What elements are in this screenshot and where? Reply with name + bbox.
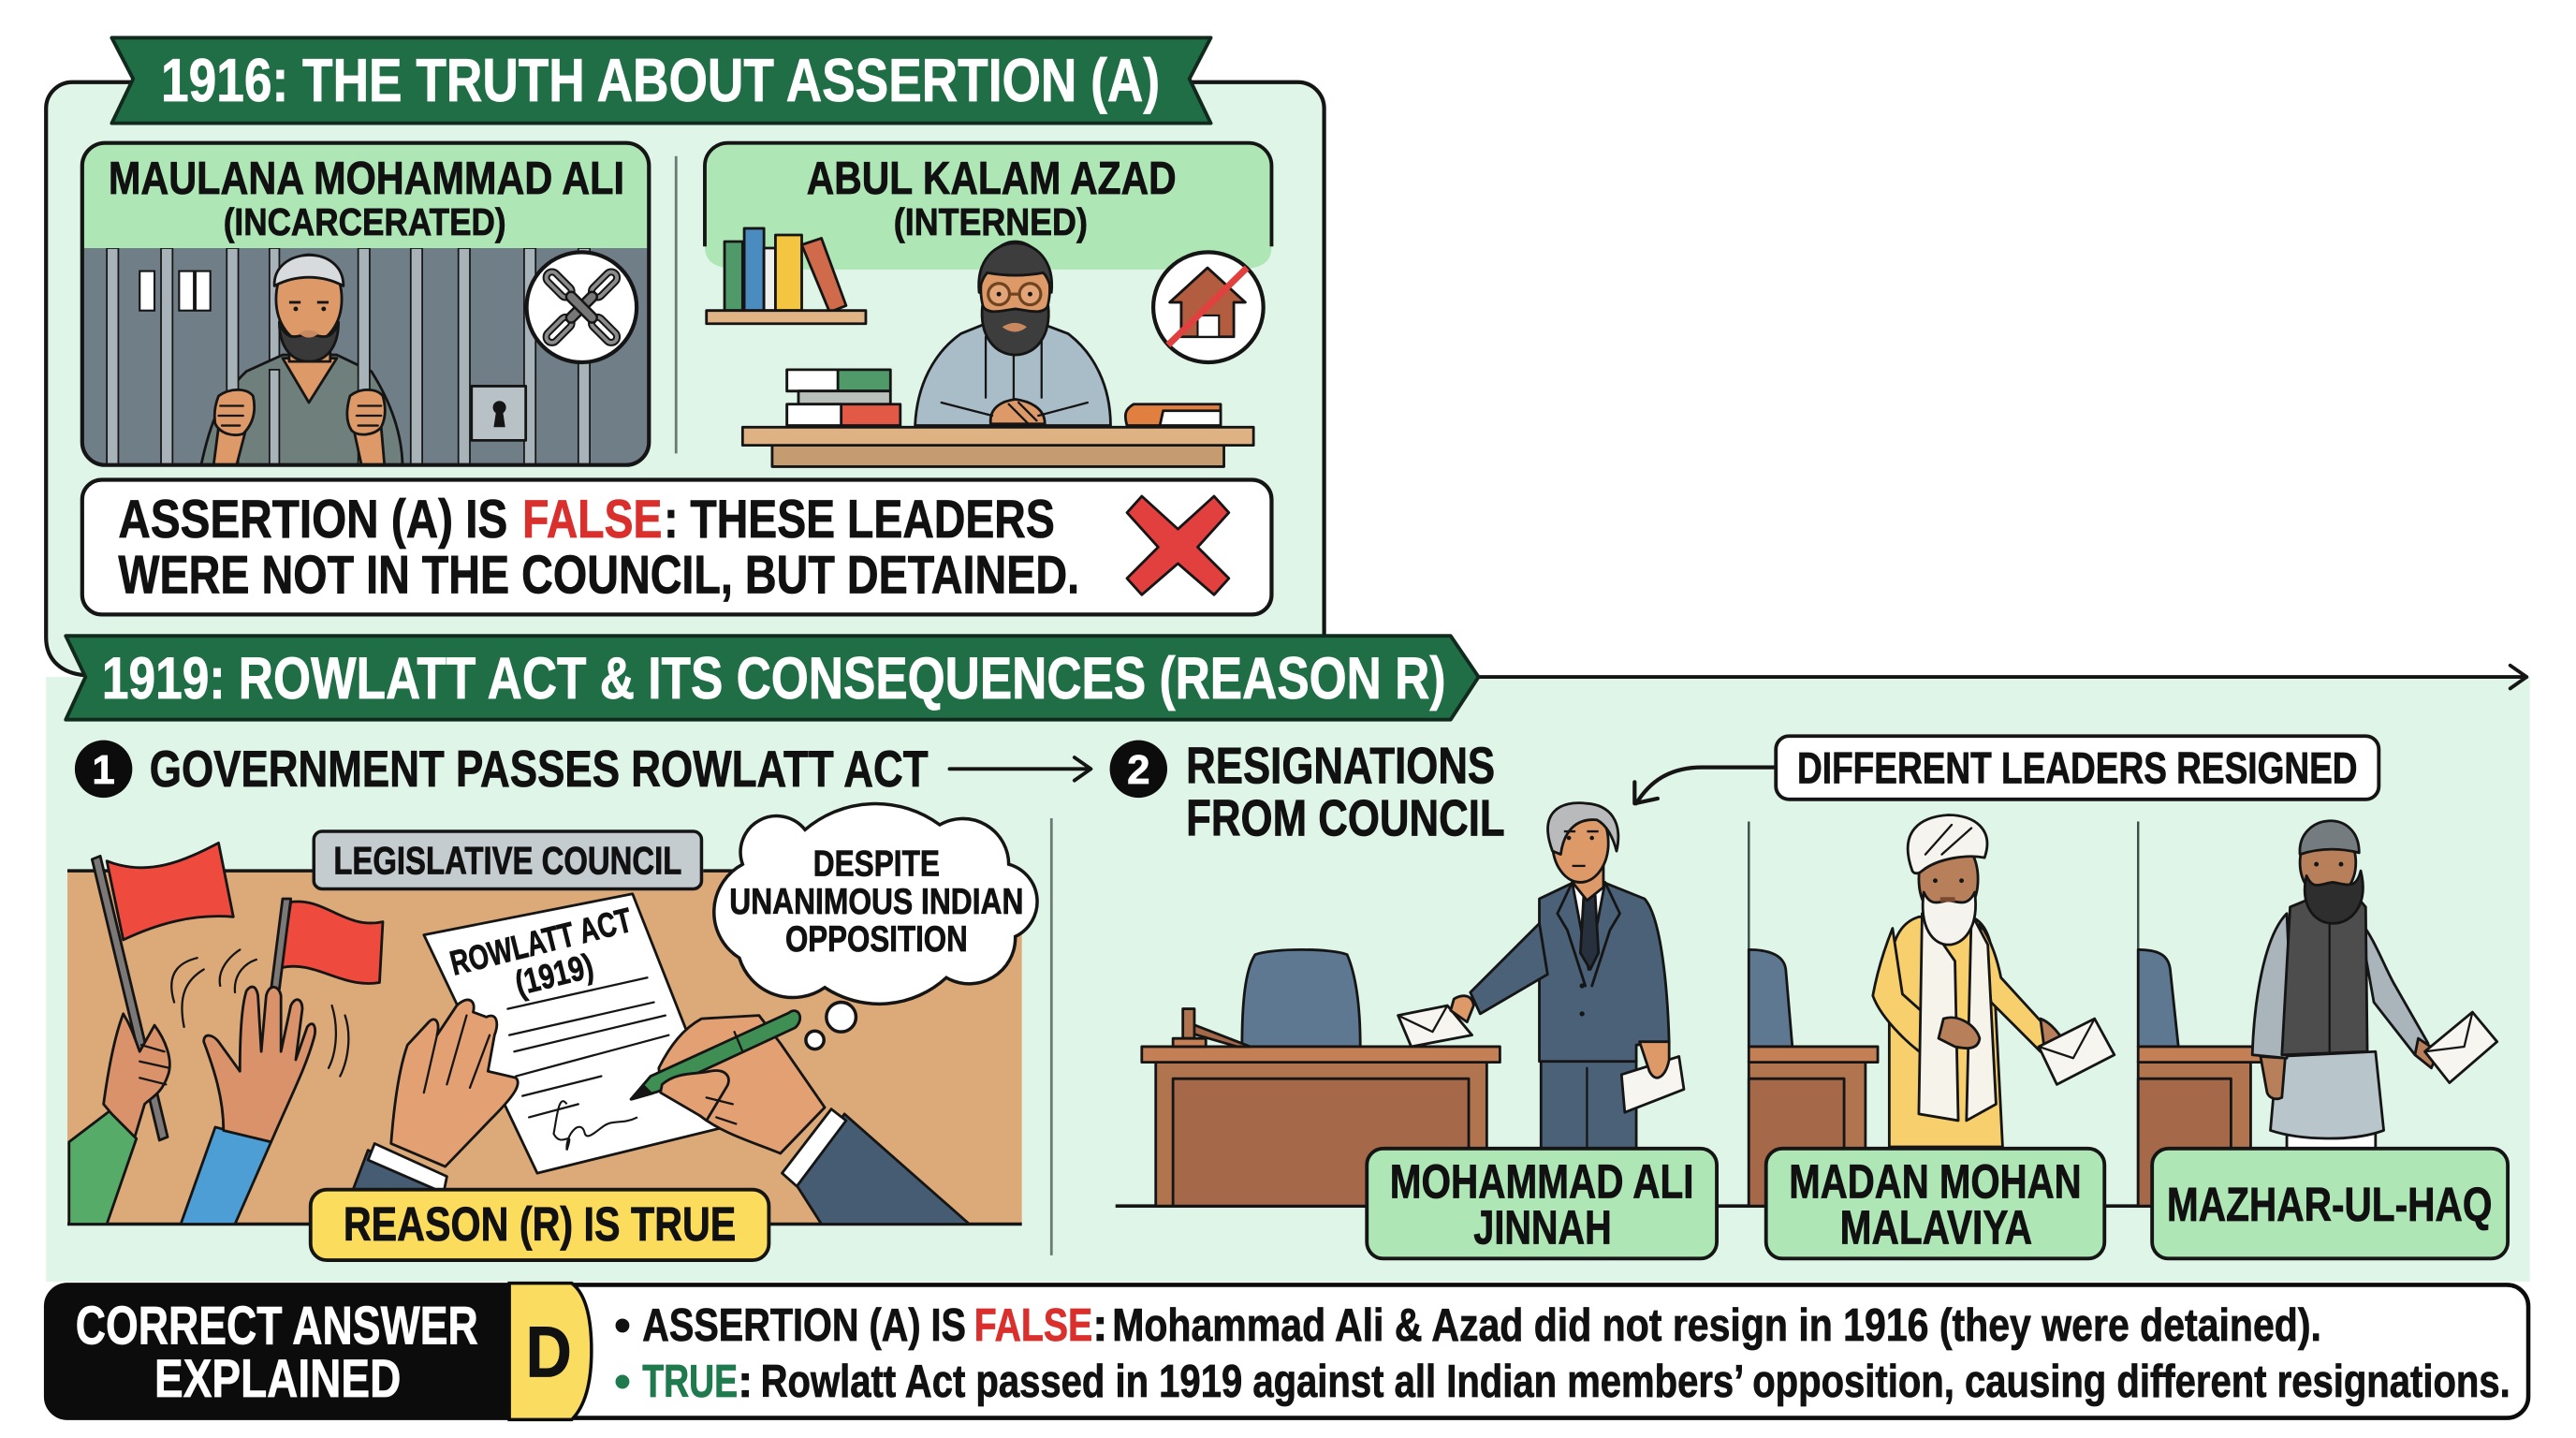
scene: signing the Rowlatt Act bbox=[67, 843, 1022, 1232]
council desk with chair and gavel bbox=[1142, 949, 1500, 1206]
answer title: EXPLAINED bbox=[154, 1349, 401, 1409]
desk with books bbox=[742, 370, 1253, 466]
verdict text: FALSE bbox=[522, 490, 662, 550]
label: Mohammad Ali Jinnah: JINNAH bbox=[1473, 1201, 1612, 1255]
step 2 heading: RESIGNATIONS bbox=[1186, 737, 1495, 794]
banner: 1919 heading bbox=[66, 636, 1479, 720]
answer letter bbox=[509, 1284, 592, 1419]
person: Mazhar-ul-Haq bbox=[2252, 821, 2497, 1151]
panel: 1919 reason bbox=[46, 636, 2530, 1282]
envelope in left hand bbox=[1398, 1005, 1472, 1047]
verdict text: WERE NOT IN THE COUNCIL, BUT DETAINED. bbox=[118, 546, 1079, 606]
name: Abul Kalam Azad: ABUL KALAM AZAD bbox=[807, 154, 1177, 204]
answer letter: D bbox=[526, 1313, 572, 1393]
explanation text: : bbox=[738, 1357, 753, 1407]
waving motion marks bbox=[171, 949, 348, 1077]
label: Mohammad Ali Jinnah: MOHAMMAD ALI bbox=[1390, 1154, 1693, 1208]
council desk three bbox=[2138, 949, 2270, 1206]
signature bbox=[554, 1101, 637, 1151]
step 2 heading bbox=[1110, 737, 1505, 846]
raised open hand bbox=[181, 987, 315, 1224]
verdict text bbox=[118, 490, 1079, 606]
arrow: step 1 to step 2 bbox=[949, 757, 1090, 781]
hand holding flag bbox=[69, 1014, 169, 1224]
document: Rowlatt Act: (1919) bbox=[511, 946, 597, 1003]
icon: crossed house bbox=[1153, 252, 1264, 362]
answer title: CORRECT ANSWER bbox=[76, 1297, 478, 1357]
prison cell illustration bbox=[107, 248, 590, 468]
lock plate bbox=[472, 386, 526, 440]
label: Madan Mohan Malaviya: MALAVIYA bbox=[1840, 1201, 2032, 1255]
step 1 heading: GOVERNMENT PASSES ROWLATT ACT bbox=[150, 741, 929, 798]
step 1 heading: 1 bbox=[92, 747, 115, 793]
label: reason is true bbox=[311, 1190, 768, 1260]
label: Madan Mohan Malaviya bbox=[1766, 1149, 2104, 1258]
explanation text: • bbox=[614, 1300, 631, 1351]
person: Azad at desk bbox=[915, 242, 1110, 426]
document: Rowlatt Act bbox=[424, 894, 724, 1173]
person: Madan Mohan Malaviya bbox=[1873, 814, 2115, 1147]
thought bubble: opposition bbox=[714, 803, 1037, 1049]
callout: different leaders resigned: DIFFERENT LEADERS RESIGNED bbox=[1797, 743, 2358, 793]
banner: 1919 heading: 1919: ROWLATT ACT & ITS CONSEQUENCES (REASON R) bbox=[102, 646, 1445, 712]
bookshelf bbox=[707, 228, 866, 324]
thought bubble: opposition: OPPOSITION bbox=[785, 919, 968, 960]
protest flags bbox=[92, 843, 383, 1140]
callout: different leaders resigned bbox=[1776, 736, 2378, 800]
step 2 heading: 2 bbox=[1127, 747, 1149, 793]
signing hand with sleeve left bbox=[352, 998, 520, 1188]
verdict text: ASSERTION (A) IS bbox=[118, 490, 507, 550]
explanation text: Mohammad Ali & Azad did not resign in 1916 (they were detained). bbox=[1112, 1300, 2321, 1351]
envelope in right hand bbox=[1621, 1056, 1684, 1112]
name: Maulana Mohammad Ali: MAULANA MOHAMMAD ALI bbox=[109, 154, 624, 204]
label: reason is true: REASON (R) IS TRUE bbox=[344, 1197, 736, 1251]
status: incarcerated: (INCARCERATED) bbox=[224, 200, 506, 243]
panel: Abul Kalam Azad bbox=[705, 143, 1271, 466]
label: legislative council bbox=[314, 831, 701, 888]
arrow: callout to leaders bbox=[1634, 768, 1774, 803]
label: legislative council: LEGISLATIVE COUNCIL bbox=[333, 839, 681, 883]
answer bar bbox=[46, 1284, 2528, 1419]
label: Mazhar-ul-Haq bbox=[2152, 1149, 2508, 1258]
scene: council floor line bbox=[1116, 1205, 2152, 1207]
banner: 1916 heading: 1916: THE TRUTH ABOUT ASSERTION (A) bbox=[161, 46, 1160, 114]
icon: broken chain bbox=[527, 252, 637, 362]
label: Mohammad Ali Jinnah bbox=[1367, 1149, 1717, 1258]
callout: assertion false bbox=[82, 479, 1271, 614]
explanation text: FALSE bbox=[974, 1300, 1092, 1351]
signing hand with pen bbox=[631, 1011, 970, 1224]
panel: 1916 assertion bbox=[46, 37, 1325, 677]
explanation text: ASSERTION (A) IS bbox=[642, 1300, 966, 1351]
verdict text: : THESE LEADERS bbox=[664, 490, 1055, 550]
icon: red cross bbox=[1127, 496, 1229, 594]
answer title bbox=[76, 1297, 478, 1409]
label: Madan Mohan Malaviya: MADAN MOHAN bbox=[1789, 1154, 2082, 1208]
label: Mazhar-ul-Haq: MAZHAR-UL-HAQ bbox=[2167, 1178, 2492, 1231]
step 2 heading: FROM COUNCIL bbox=[1186, 789, 1505, 846]
explanation text: TRUE bbox=[642, 1357, 738, 1407]
status: interned: (INTERNED) bbox=[894, 200, 1088, 243]
panel: Maulana Mohammad Ali bbox=[82, 143, 649, 468]
explanation text: • bbox=[614, 1357, 631, 1407]
document: Rowlatt Act: ROWLATT ACT bbox=[446, 901, 636, 983]
person: Mohammad Ali Jinnah bbox=[1398, 803, 1684, 1151]
explanation text: : bbox=[1092, 1300, 1108, 1351]
banner: 1916 heading bbox=[111, 37, 1211, 124]
thought bubble: opposition: UNANIMOUS INDIAN bbox=[729, 882, 1023, 922]
explanation text bbox=[614, 1300, 2510, 1407]
thought bubble: opposition: DESPITE bbox=[813, 844, 940, 884]
council desk two bbox=[1749, 949, 1878, 1206]
timeline arrow bbox=[1471, 666, 2526, 688]
